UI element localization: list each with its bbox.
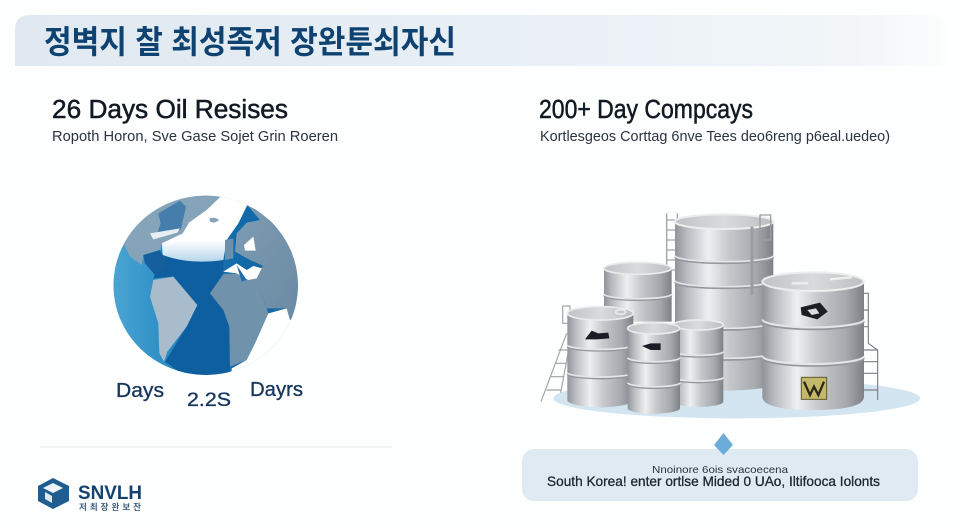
cut-away lower right <box>232 308 291 372</box>
north america <box>123 190 221 265</box>
callout small line: Nnoinore 6ois svacoecena <box>652 464 788 476</box>
globe label: days left: Days <box>116 380 164 402</box>
right subheading: Kortlesgeos Corttag 6nve Tees deo6reng p6eal.uedeo) <box>540 129 890 145</box>
callout <box>522 449 918 501</box>
big right drum <box>762 272 864 410</box>
logo subtitle: 저 최 장 완 보 잔 <box>79 502 141 512</box>
south america <box>150 277 197 362</box>
title: 정벽지 찰 최성족저 장완툰쇠자신 <box>44 24 456 60</box>
logo <box>38 478 142 512</box>
globe label: value: 2.2S <box>187 390 231 411</box>
polar glow <box>162 196 247 262</box>
front drum <box>628 323 680 414</box>
logo name: SNVLH <box>78 483 142 504</box>
arrow: diamond marker <box>714 433 733 455</box>
back ladder <box>667 213 677 280</box>
left subheading: Ropoth Horon, Sve Gase Sojet Grin Roeren <box>52 129 338 145</box>
central dark ocean <box>153 255 230 380</box>
mid back tank <box>604 262 672 322</box>
panel: company reserves <box>522 96 920 501</box>
globe label: days right: Dayrs <box>250 379 303 401</box>
back right drum <box>673 320 723 407</box>
header band <box>15 15 946 66</box>
left heading: 26 Days Oil Resises <box>52 96 288 124</box>
tall tank <box>675 214 773 391</box>
ground shadow <box>553 378 920 418</box>
left drum <box>567 307 633 407</box>
storage tanks illustration <box>541 213 920 418</box>
right ladder <box>858 293 878 400</box>
left ladder <box>541 306 570 402</box>
right heading: 200+ Day Compcays <box>539 96 753 124</box>
eurasia <box>235 206 298 320</box>
callout main line: South Korea! enter ortlse Mided 0 UAo, Iltifooca Iolonts <box>547 473 880 489</box>
africa <box>210 273 268 367</box>
panel: oil reserves <box>52 96 338 411</box>
globe icon <box>113 196 298 375</box>
logo cube icon <box>38 478 69 509</box>
